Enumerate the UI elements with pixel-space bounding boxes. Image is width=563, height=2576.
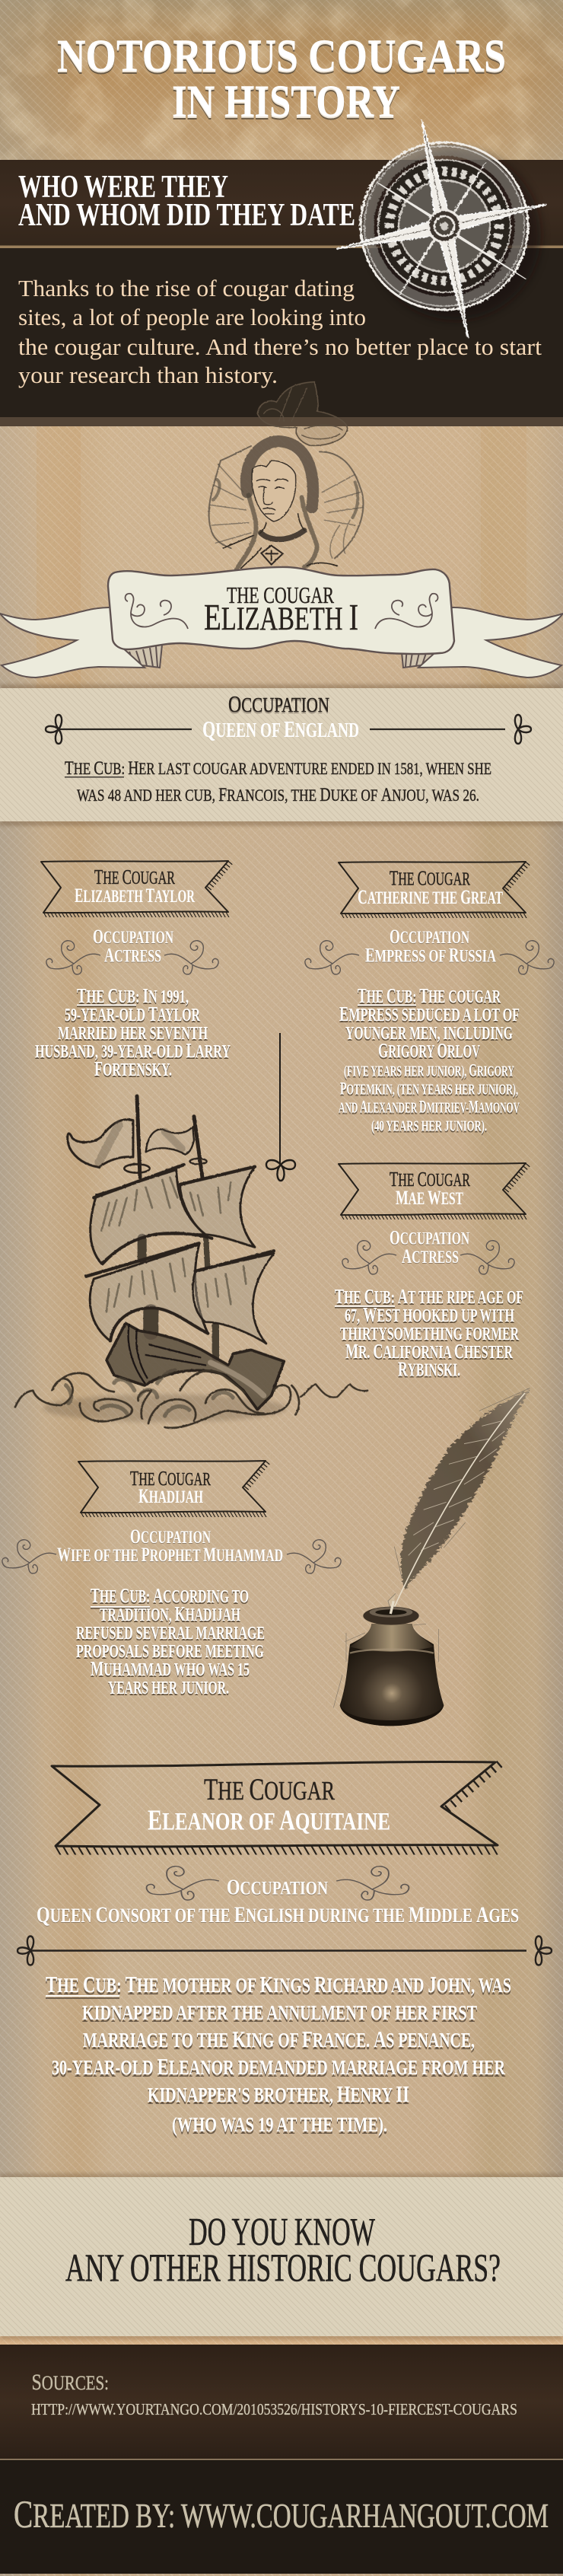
occupation: QUEEN CONSORT OF THE ENGLISH DURING THE MIDDLE AGES [37, 1903, 519, 1927]
flourishes [46, 941, 218, 974]
the cub text: THE CUB: IN 1991, [77, 984, 189, 1007]
occupation: OCCUPATION [390, 1227, 469, 1248]
panel: sources [0, 2345, 563, 2459]
subheading: WHO WERE THEY [18, 170, 228, 205]
flourishes [342, 1241, 514, 1274]
the cub text: THE CUB: THE COUGAR [358, 984, 501, 1007]
illustration: ship [15, 1096, 367, 1428]
ribbon: ELIZABETH TAYLOR [75, 885, 195, 907]
panel: Mae West [335, 1163, 528, 1381]
the cub text: 59-YEAR-OLD TAYLOR [65, 1003, 200, 1025]
panel: Eleanor of Aquitaine [17, 1761, 552, 2136]
subheading [18, 170, 355, 233]
occupation label: OCCUPATION [228, 691, 329, 717]
ribbon: THE COUGAR [390, 866, 470, 889]
the cub text: WAS 48 AND HER CUB, FRANCOIS, THE DUKE OF ANJOU, WAS 26. [77, 785, 479, 805]
ribbon: THE COUGAR [94, 866, 175, 888]
panel: Khadijah [2, 1461, 341, 1698]
ribbon [339, 1163, 528, 1216]
occupation: OCCUPATION [390, 926, 469, 948]
flourishes [2, 1540, 341, 1573]
intro paragraph [18, 275, 542, 388]
panel: intro bands [0, 160, 563, 426]
feather [388, 1388, 530, 1612]
intro paragraph: sites, a lot of people are looking into [18, 304, 366, 330]
ribbon [52, 1761, 500, 1851]
ribbon [78, 1461, 268, 1515]
title: IN HISTORY [172, 76, 400, 126]
intro paragraph: the cougar culture. And there’s no better place to start [18, 333, 542, 360]
ribbon: THE COUGAR [204, 1772, 335, 1806]
occupation: WIFE OF THE PROPHET MUHAMMAD [57, 1544, 283, 1566]
the cub text: MARRIAGE TO THE KING OF FRANCE. AS PENANCE, [83, 2026, 475, 2052]
flourishes [305, 941, 554, 974]
the cub text: YEARS HER JUNIOR. [108, 1679, 229, 1698]
illustration: quill and inkwell [333, 1388, 530, 1726]
occupation [93, 926, 173, 967]
banner tails [0, 607, 563, 677]
the cub text: TRADITION, KHADIJAH [100, 1602, 240, 1625]
panel: Catherine the Great [305, 862, 554, 1134]
flags [68, 1120, 133, 1167]
panel: closing question [0, 2173, 563, 2340]
occupation value: QUEEN OF ENGLAND [202, 716, 359, 742]
occupation: OCCUPATION [130, 1526, 211, 1548]
ribbon: KHADIJAH [138, 1485, 203, 1507]
banner title: ELIZABETH I [204, 596, 358, 638]
ribbon: MAE WEST [396, 1187, 463, 1209]
sails [91, 1170, 205, 1264]
title: NOTORIOUS COUGARS [57, 30, 506, 81]
the cub text [35, 984, 231, 1080]
banner title: THE COUGAR [227, 582, 334, 608]
banner flourishes [126, 594, 437, 629]
occupation: ACTRESS [104, 944, 161, 967]
the cub text: FORTENSKY. [94, 1057, 172, 1080]
occupation: OCCUPATION [227, 1876, 328, 1900]
the cub text: THE CUB: THE MOTHER OF KINGS RICHARD AND JOHN, WAS [46, 1972, 511, 1997]
occupation: EMPRESS OF RUSSIA [365, 944, 496, 967]
the cub text: THE CUB: ACCORDING TO [91, 1584, 249, 1607]
the cub text [339, 984, 520, 1134]
the cub text [65, 758, 491, 805]
banner: Elizabeth I [0, 567, 563, 677]
ribbon [339, 862, 528, 915]
divider: hanging rule [266, 1033, 295, 1181]
divider left [46, 715, 192, 744]
the cub text [46, 1972, 511, 2136]
question text [65, 2211, 501, 2290]
inkwell [333, 1601, 444, 1726]
ribbon: ELEANOR OF AQUITAINE [148, 1804, 390, 1836]
occupation: OCCUPATION [93, 926, 173, 948]
divider [17, 1937, 552, 1965]
intro paragraph: your research than history. [18, 362, 278, 388]
occupation [365, 926, 496, 967]
the cub text: HUSBAND, 39-YEAR-OLD LARRY [35, 1039, 231, 1062]
subheading: AND WHOM DID THEY DATE [18, 198, 355, 233]
the cub text: PROPOSALS BEFORE MEETING [76, 1642, 264, 1662]
the cub text: (40 YEARS HER JUNIOR). [371, 1117, 487, 1134]
panel: Elizabeth Taylor [35, 861, 231, 1080]
occupation: ACTRESS [402, 1245, 459, 1267]
illustration: portrait of Elizabeth I [209, 382, 364, 571]
banner title [204, 582, 358, 638]
intro paragraph: Thanks to the rise of cougar dating [18, 275, 355, 301]
waves [15, 1373, 114, 1407]
the cub text: MUHAMMAD WHO WAS 15 [91, 1657, 250, 1680]
occupation [37, 1876, 519, 1927]
flourishes [147, 1867, 409, 1900]
panel: Elizabeth I details [0, 684, 563, 826]
ribbon: THE COUGAR [130, 1467, 211, 1490]
question text: DO YOU KNOW [189, 2211, 375, 2254]
yards [86, 1165, 274, 1277]
the cub text: KIDNAPPER'S BROTHER, HENRY II [148, 2081, 409, 2107]
divider right [370, 715, 531, 744]
the cub text: GRIGORY ORLOV [378, 1039, 480, 1062]
ribbon [41, 861, 231, 915]
the cub text: RYBINSKI. [398, 1358, 460, 1381]
the cub text: AND ALEXANDER DMITRIEV-MAMONOV [339, 1098, 520, 1116]
masts [137, 1096, 202, 1178]
the cub text: MR. CALIFORNIA CHESTER [345, 1340, 513, 1363]
ribbon: CATHERINE THE GREAT [358, 886, 503, 908]
the cub text: REFUSED SEVERAL MARRIAGE [76, 1624, 265, 1643]
the cub text: (FIVE YEARS HER JUNIOR), GRIGORY [344, 1061, 514, 1079]
banner centre [108, 567, 454, 654]
sources label: SOURCES: [32, 2370, 109, 2395]
icon: compass [313, 97, 563, 361]
the cub text [76, 1584, 265, 1698]
hull [107, 1323, 284, 1410]
the cub text [335, 1285, 523, 1381]
occupation [390, 1227, 469, 1267]
the cub text: (WHO WAS 19 AT THE TIME). [172, 2113, 387, 2136]
ribbon: THE COUGAR [390, 1168, 470, 1191]
title [57, 30, 506, 126]
panel: credits [0, 2459, 563, 2574]
the cub text: MARRIED HER SEVENTH [58, 1024, 208, 1044]
occupation [57, 1526, 283, 1566]
